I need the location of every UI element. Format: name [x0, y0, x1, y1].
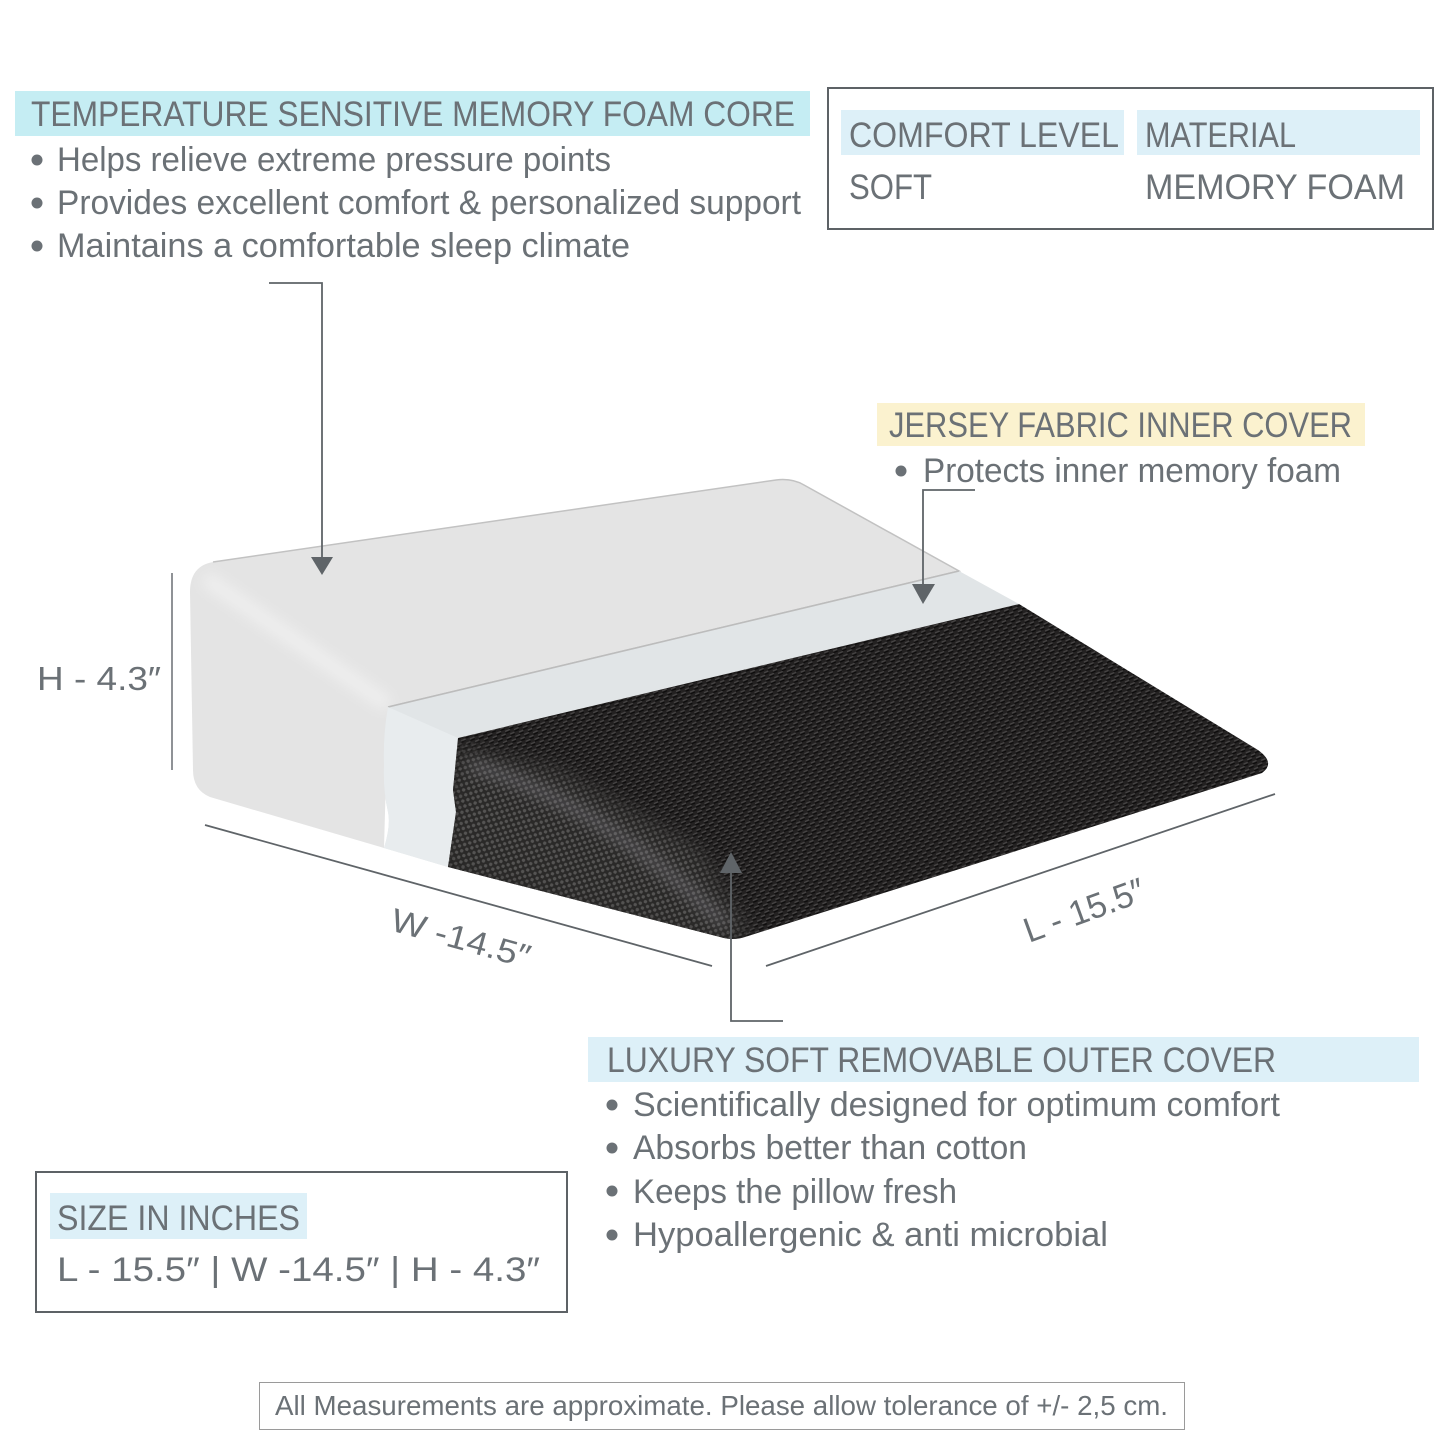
bullet list: memory foam benefits [32, 141, 802, 265]
size heading: SIZE IN INCHES [57, 1199, 300, 1238]
material column [1137, 110, 1420, 207]
dimension: length: L - 15.5″ [1018, 871, 1150, 951]
panel: outer cover callout [588, 1037, 1419, 1254]
wedge pillow illustration [190, 480, 1268, 960]
comfort level column: COMFORT LEVEL [849, 116, 1119, 155]
arrow: memory foam core leader [269, 283, 333, 575]
heading bar: outer cover: LUXURY SOFT REMOVABLE OUTER COVER [607, 1041, 1276, 1080]
material column: MEMORY FOAM [1145, 168, 1405, 207]
comfort level column: SOFT [849, 168, 932, 207]
footnote: measurement tolerance: All Measurements are approximate. Please allow tolerance of +/- 2,5 cm. [275, 1390, 1168, 1421]
bullet list: outer cover benefits: Keeps the pillow fresh [633, 1173, 957, 1211]
heading bar: memory foam core: TEMPERATURE SENSITIVE MEMORY FOAM CORE [31, 95, 795, 134]
size values: L - 15.5″ | W -14.5″ | H - 4.3″ [57, 1251, 540, 1289]
material column: MATERIAL [1145, 116, 1296, 155]
dimension: width: W -14.5″ [387, 901, 535, 975]
bullet list: memory foam benefits: Maintains a comfortable sleep climate [57, 227, 630, 265]
bullet list: memory foam benefits: Helps relieve extreme pressure points [57, 141, 611, 179]
bullet list: memory foam benefits: Provides excellent comfort & personalized support [57, 184, 802, 222]
bullet list: outer cover benefits: Hypoallergenic & anti microbial [633, 1216, 1108, 1254]
footnote: measurement tolerance [260, 1382, 1184, 1430]
bullet list: outer cover benefits [606, 1086, 1281, 1254]
panel: size in inches [36, 1172, 567, 1312]
panel: comfort level and material table [828, 88, 1433, 229]
jersey inner cover [384, 571, 1019, 867]
dimension: height: H - 4.3″ [37, 660, 161, 697]
panel: memory foam core callout [15, 91, 810, 265]
panel: jersey inner cover callout [877, 403, 1365, 490]
bullet list: outer cover benefits: Absorbs better than cotton [633, 1129, 1027, 1167]
dimension: width [205, 825, 712, 975]
heading bar: jersey inner cover: JERSEY FABRIC INNER COVER [889, 406, 1352, 445]
bullet list: outer cover benefits: Scientifically designed for optimum comfort [633, 1086, 1281, 1124]
foam core [190, 480, 959, 848]
arrow: outer cover leader [720, 852, 783, 1021]
black mesh outer cover [430, 604, 1268, 960]
arrow: jersey cover leader [912, 490, 975, 604]
bullet: protects inner memory foam: Protects inner memory foam [923, 452, 1341, 490]
dimension: length [766, 794, 1275, 966]
comfort level column [841, 110, 1124, 207]
